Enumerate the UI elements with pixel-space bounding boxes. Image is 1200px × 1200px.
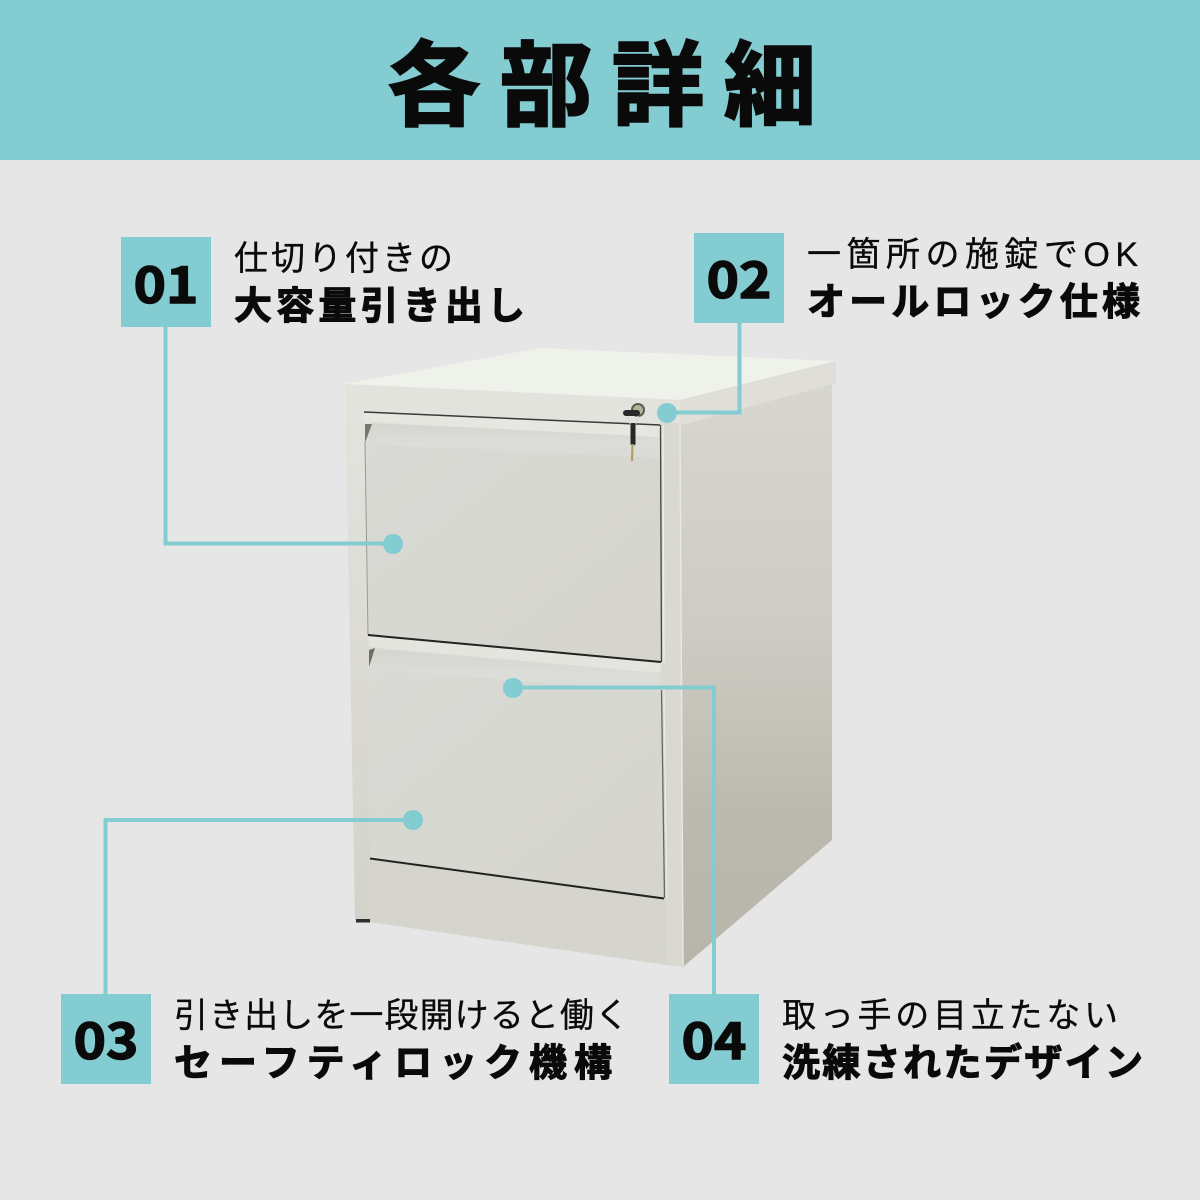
number badge 01: [121, 237, 211, 327]
number badge 01: 01: [134, 246, 198, 317]
label 03: 引き出しを一段開けると働く: [174, 997, 629, 1035]
icon: key and lock: [623, 404, 644, 461]
label 01: [234, 240, 525, 328]
label 03: セーフティロック機構: [174, 1043, 612, 1085]
top drawer rail: [364, 412, 660, 437]
number badge 04: 04: [682, 1002, 746, 1073]
label 04: 取っ手の目立たない: [782, 997, 1118, 1035]
label 02: [807, 236, 1140, 324]
callout 03: [61, 810, 629, 1085]
cabinet side face: [680, 361, 836, 967]
leader line 02: [657, 323, 740, 423]
number badge 02: [694, 233, 784, 323]
header band: [0, 0, 1200, 160]
label 02: 一箇所の施錠でOK: [807, 236, 1138, 274]
plinth: [370, 858, 667, 965]
callout 01: [121, 237, 525, 554]
right post: [660, 423, 683, 967]
label 04: [782, 997, 1143, 1085]
leader line 01: [166, 327, 403, 554]
cabinet front frame: [345, 384, 683, 967]
cabinet top face: [345, 348, 836, 400]
title: 各部詳細: [388, 12, 816, 145]
label 02: オールロック仕様: [807, 282, 1140, 324]
cabinet front corner highlight: [680, 424, 683, 966]
number badge 04: [669, 994, 759, 1084]
number badge 03: [61, 994, 151, 1084]
label 03: [174, 997, 629, 1085]
label 01: 大容量引き出し: [234, 286, 525, 328]
callout 04: [503, 678, 1143, 1085]
leader line 03: [106, 810, 423, 994]
cabinet foot: [356, 919, 370, 922]
top drawer: [365, 423, 664, 662]
label 04: 洗練されたデザイン: [782, 1042, 1143, 1085]
number badge 02: 02: [707, 241, 771, 312]
label 01: 仕切り付きの: [234, 240, 453, 278]
filing cabinet: [345, 348, 836, 967]
number badge 03: 03: [74, 1002, 138, 1073]
leader line 04: [503, 678, 714, 994]
lower drawer rail: [368, 635, 661, 673]
lower drawer: [369, 648, 667, 898]
callout 02: [657, 233, 1140, 423]
